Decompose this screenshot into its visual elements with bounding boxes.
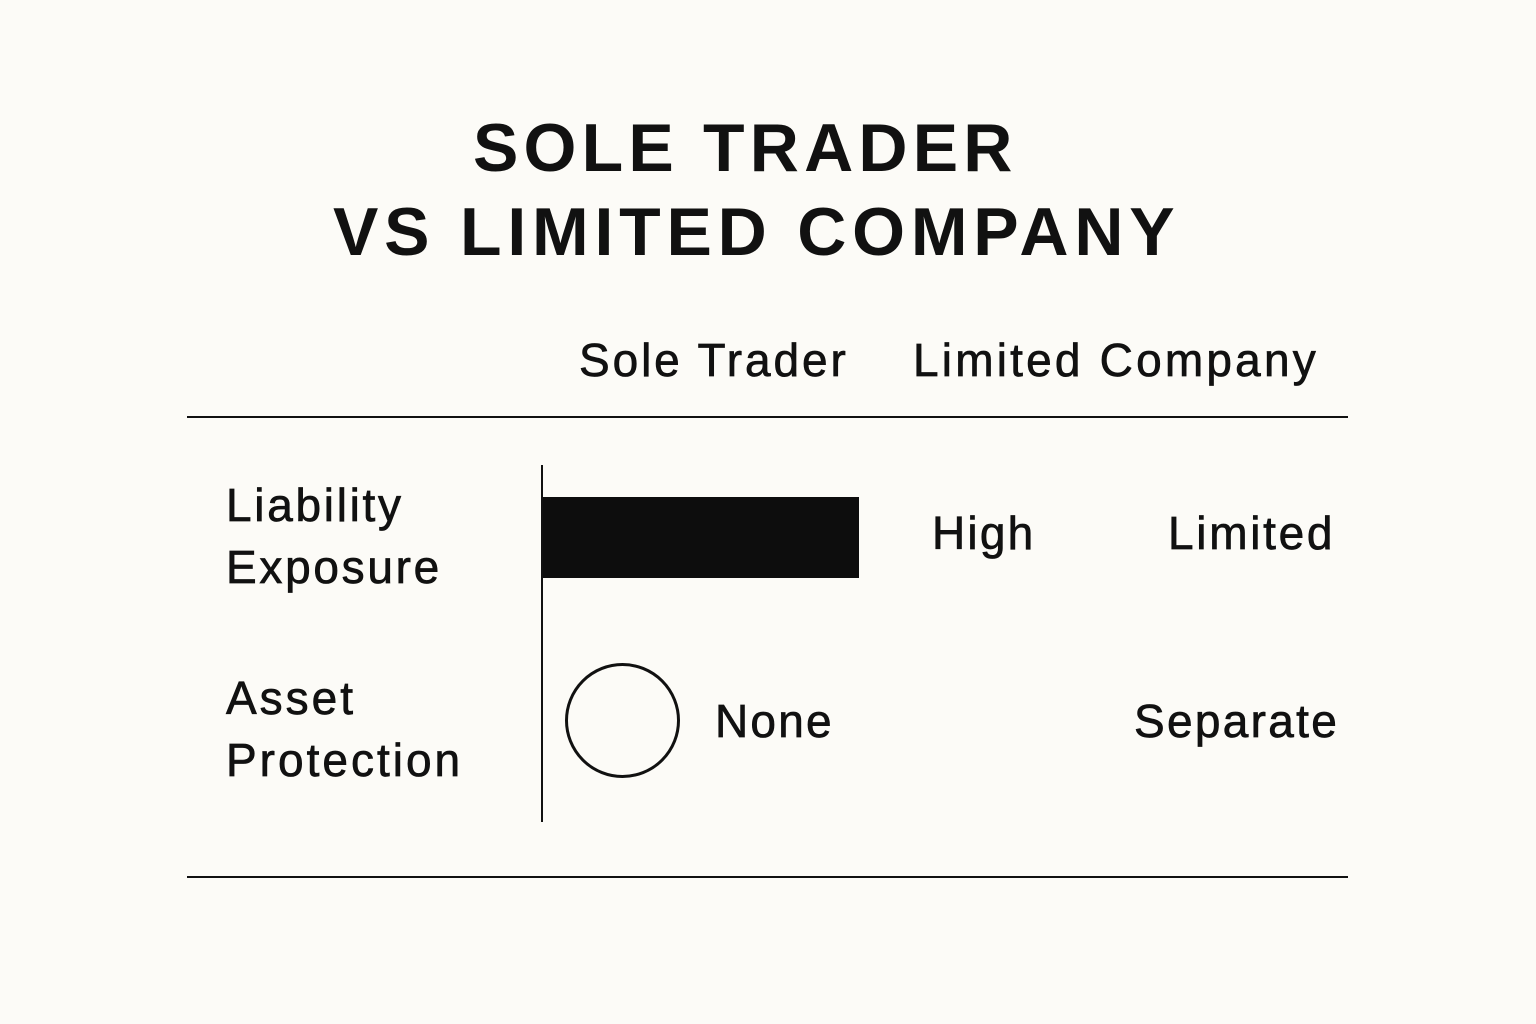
title: VS LIMITED COMPANY — [333, 194, 1180, 270]
value: high: High — [932, 507, 1035, 559]
column header: sole trader: Sole Trader — [579, 334, 849, 386]
row label: liability exposure: Exposure — [226, 541, 442, 593]
icon: empty circle — [565, 663, 680, 778]
column header: limited company: Limited Company — [913, 334, 1319, 386]
row label: liability exposure: Liability — [226, 479, 404, 531]
bar: sole trader liability — [543, 497, 859, 578]
value: none: None — [715, 695, 834, 747]
row label: liability exposure — [226, 479, 442, 593]
value: limited: Limited — [1168, 507, 1335, 559]
row label: asset protection — [226, 672, 463, 786]
value: separate: Separate — [1134, 695, 1339, 747]
row label: asset protection: Asset — [226, 672, 356, 724]
row label: asset protection: Protection — [226, 734, 463, 786]
title — [333, 110, 1180, 270]
title: SOLE TRADER — [473, 110, 1018, 186]
